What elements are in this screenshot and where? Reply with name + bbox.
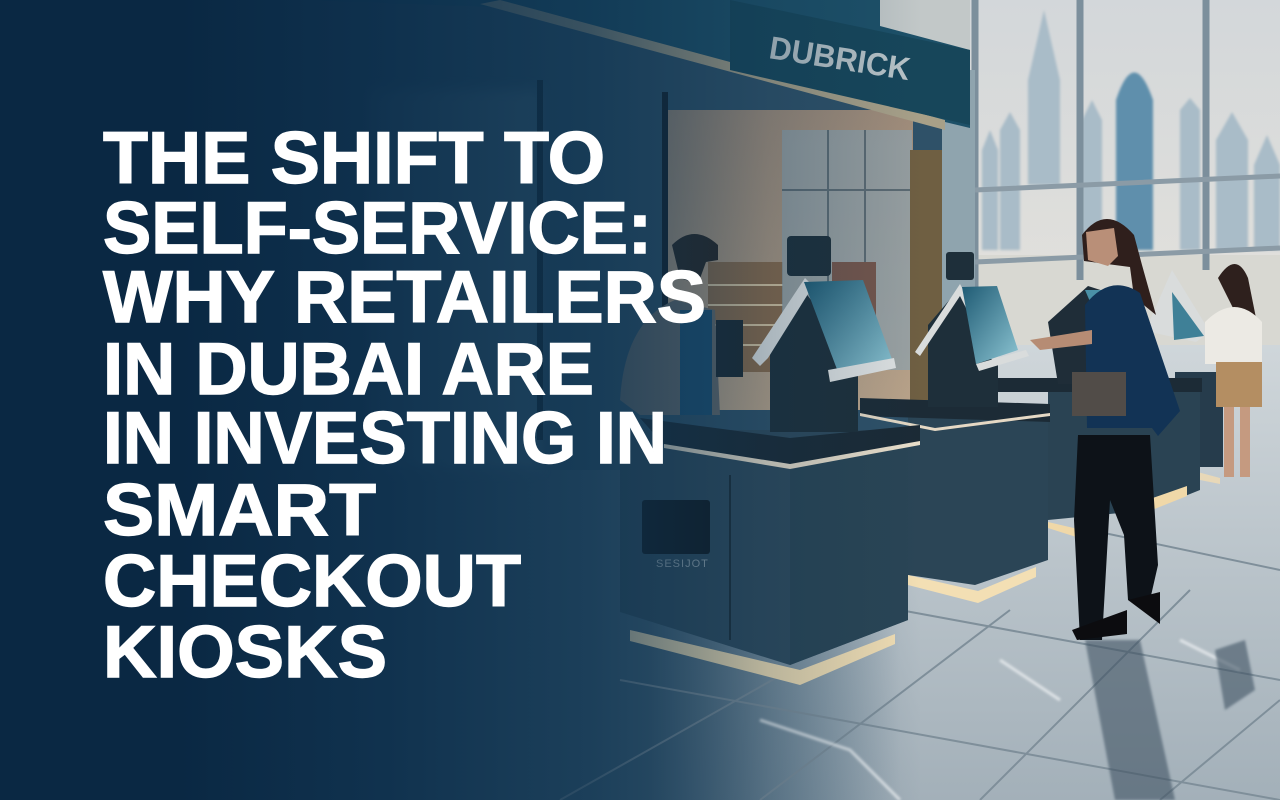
title: SMART: [103, 470, 376, 551]
title: WHY RETAILERS: [103, 257, 706, 338]
background: marble floor: [0, 345, 1280, 800]
title: CHECKOUT: [103, 541, 521, 622]
title: THE SHIFT TO: [103, 118, 605, 199]
kiosk 4: [1150, 270, 1223, 484]
title: IN INVESTING IN: [103, 398, 667, 479]
kiosk 2: [860, 252, 1050, 603]
background: window and Dubai skyline: [945, 0, 1280, 345]
title: KIOSKS: [103, 612, 387, 693]
kiosk label: SESIJOT: [656, 558, 709, 570]
kiosk 3: [998, 286, 1202, 543]
title: [103, 118, 706, 693]
person: customer: [1030, 219, 1180, 640]
background: store front: [0, 0, 975, 470]
kiosk 1: main: [620, 236, 920, 685]
person: woman in background: [1205, 264, 1262, 477]
title: SELF-SERVICE:: [103, 188, 652, 269]
store sign: DUBRICK: [767, 29, 913, 87]
person: staff at left: [620, 234, 743, 415]
title: IN DUBAI ARE: [103, 329, 594, 410]
